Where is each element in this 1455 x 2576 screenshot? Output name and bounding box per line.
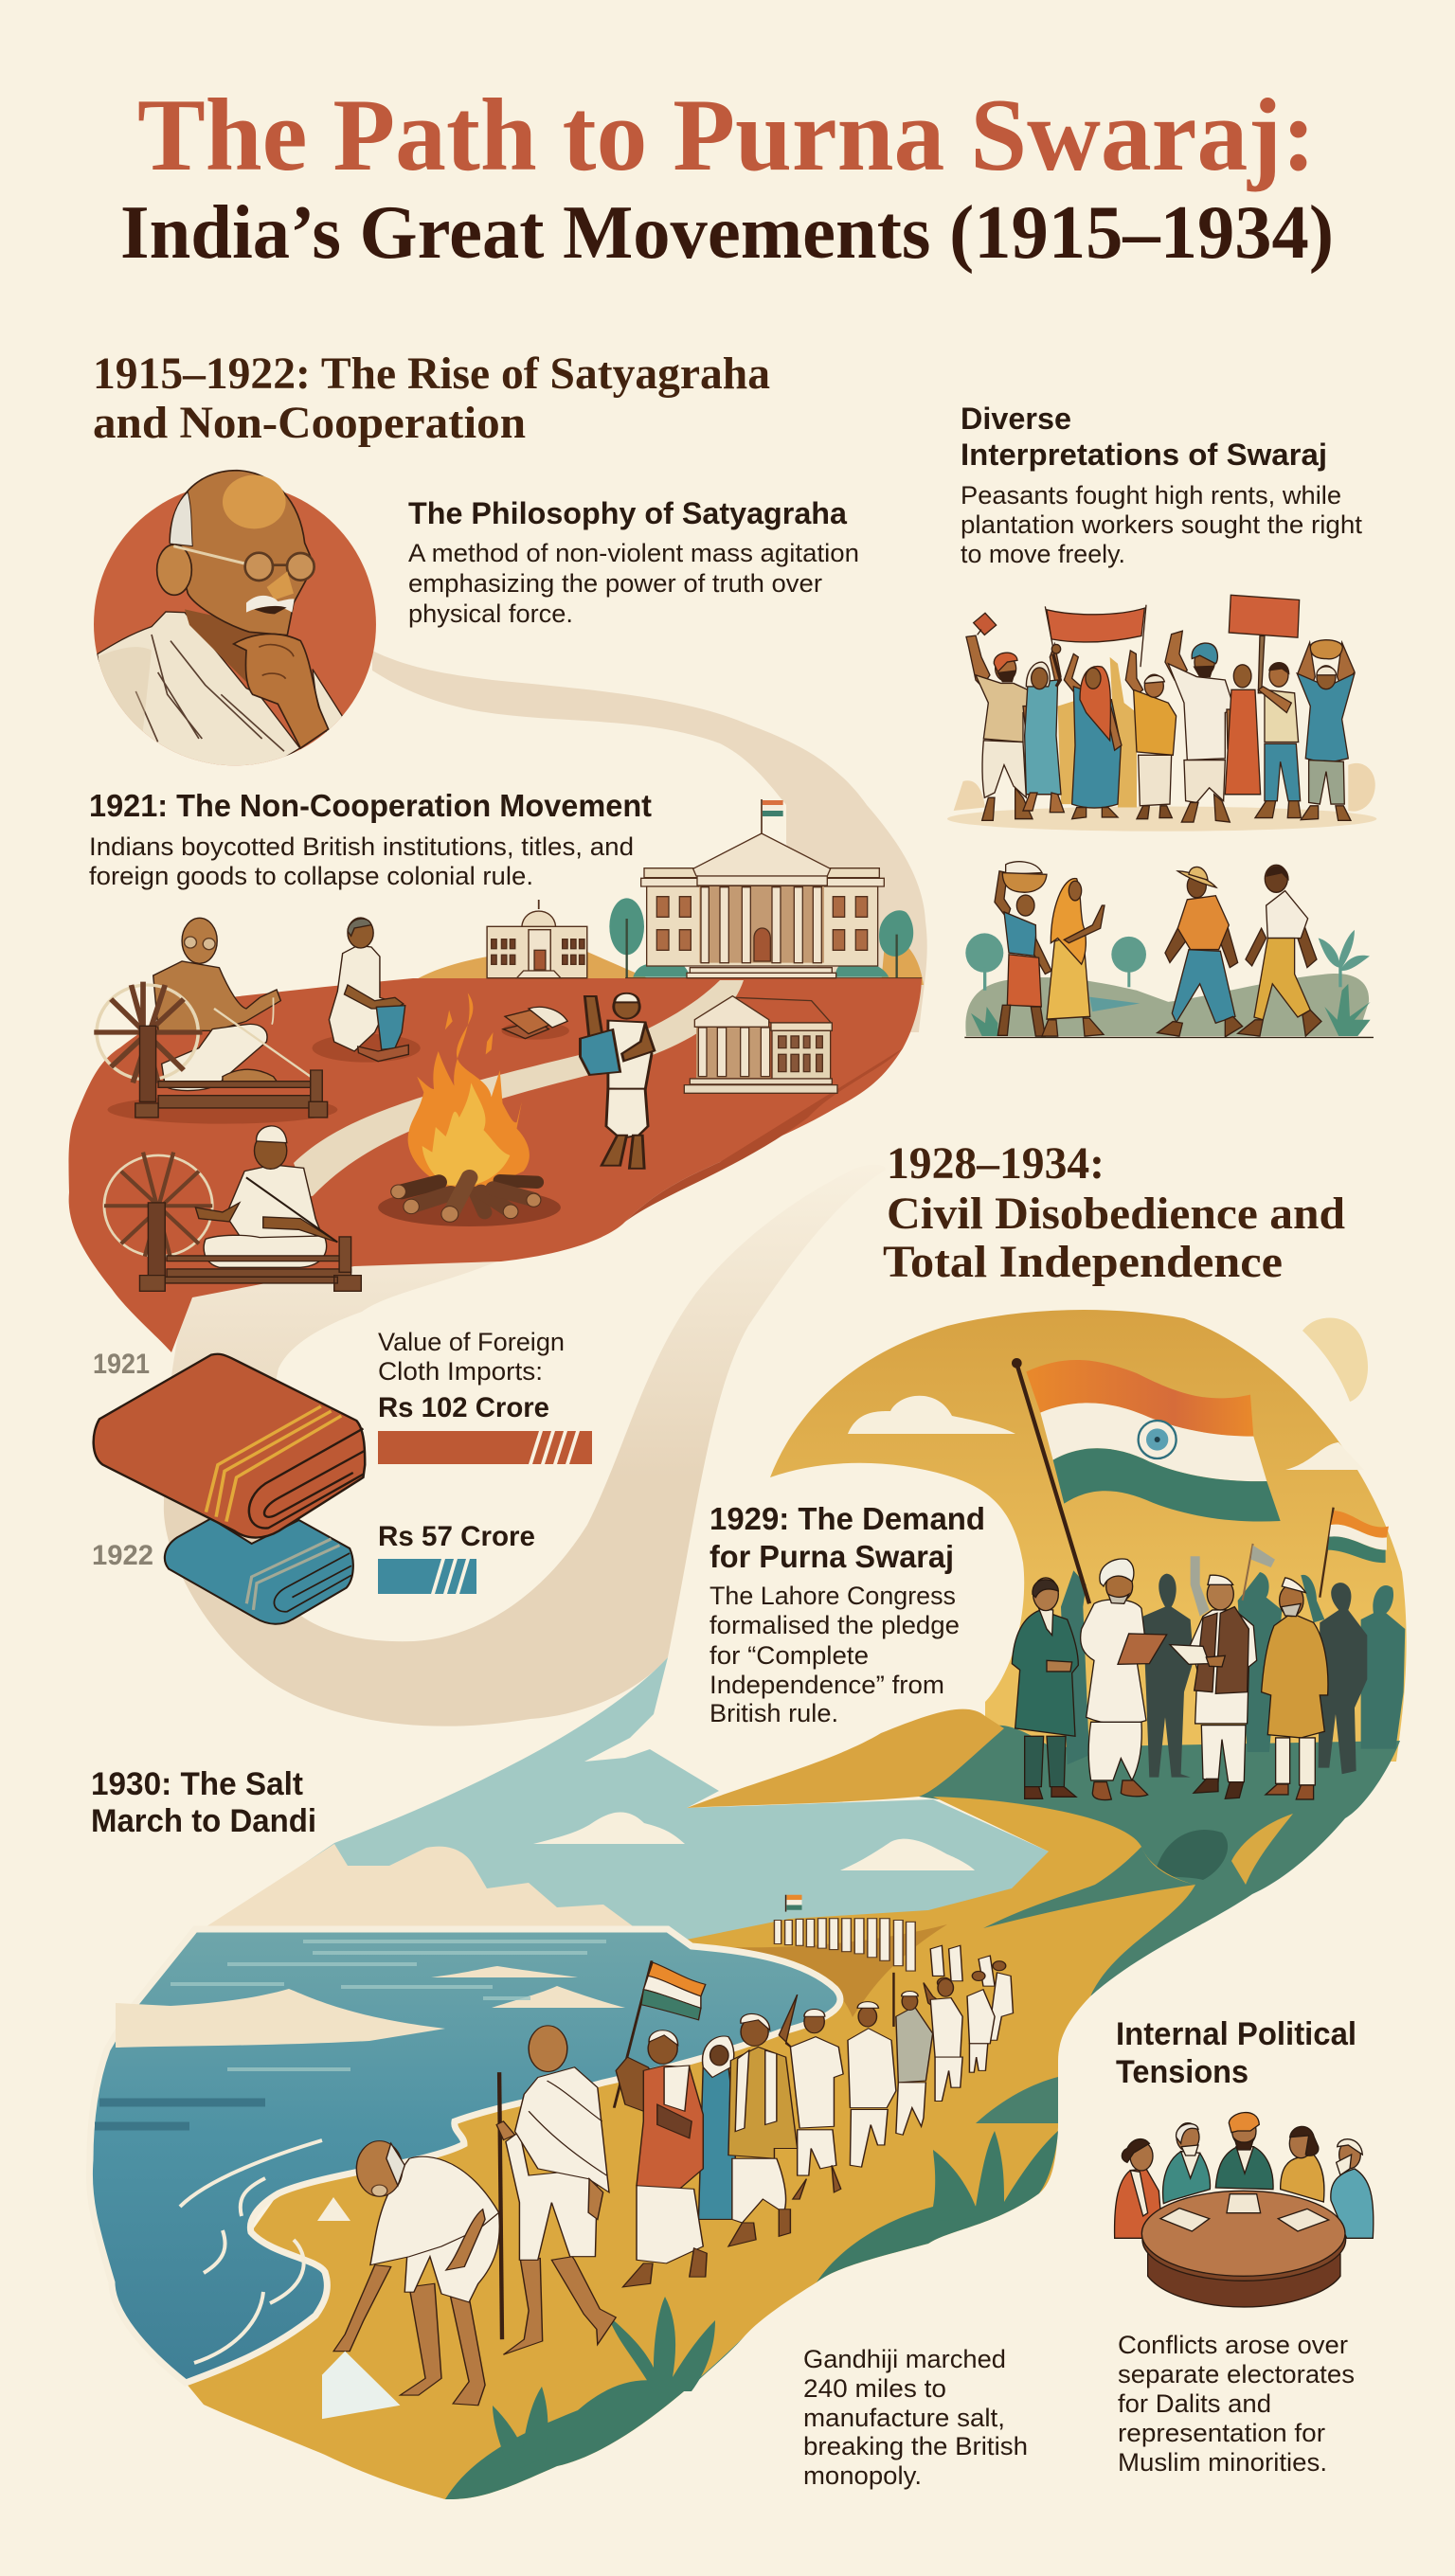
beach bbox=[186, 1797, 1195, 2499]
chart label: Value of Foreign bbox=[378, 1328, 565, 1356]
cream clouds over horizon bbox=[204, 1844, 636, 1928]
text block: diverse interpretations bbox=[961, 402, 1363, 568]
trees and bushes bbox=[609, 898, 913, 977]
table bbox=[1141, 2191, 1346, 2307]
leader in white with turban bbox=[1081, 1559, 1167, 1800]
dirt road bbox=[294, 980, 744, 1196]
protester: woman in light blue bbox=[1023, 644, 1064, 813]
tan hill bbox=[413, 933, 924, 985]
woman in blue sari bbox=[698, 2036, 735, 2219]
ground line bbox=[964, 1035, 1374, 1039]
protester: ochre top bbox=[1125, 651, 1177, 819]
text block: salt march body: 240 miles to bbox=[803, 2374, 946, 2403]
subtitle: India’s Great Movements (1915–1934) bbox=[120, 191, 1334, 275]
value Rs 57 Crore: Rs 57 Crore bbox=[378, 1521, 535, 1552]
green plants bottom bbox=[445, 2338, 743, 2499]
text block: demand for purna swaraj: 1929: The Demand bbox=[710, 1501, 985, 1536]
text block: salt march heading: March to Dandi bbox=[91, 1803, 316, 1839]
leader in green suit bbox=[1012, 1578, 1078, 1798]
chart label bbox=[378, 1328, 565, 1386]
year label 1921: 1921 bbox=[93, 1349, 150, 1380]
protester: woman in blue sari bbox=[1064, 653, 1122, 819]
green wedge between sand bands bbox=[983, 1847, 1195, 1928]
panel: 1929 scene dome bbox=[770, 1310, 1407, 1762]
banner bbox=[1045, 605, 1146, 687]
text block: demand for purna swaraj: British rule. bbox=[710, 1699, 838, 1727]
panel: Indian leaders with flag bbox=[1012, 1358, 1405, 1800]
darker sand shading bbox=[701, 1924, 947, 2017]
ribbon path: lower bbox=[164, 1165, 886, 1726]
text block: non-cooperation movement bbox=[89, 788, 652, 890]
marcher ochre bbox=[728, 2013, 798, 2246]
lower right building bbox=[684, 996, 837, 1093]
text block: internal tensions body: for Dalits and bbox=[1118, 2389, 1271, 2418]
text block: internal tensions body: separate electorates bbox=[1118, 2360, 1355, 2388]
trees bbox=[965, 930, 1371, 1036]
section heading 1928–1934 bbox=[883, 1138, 1345, 1287]
text block: internal tensions body bbox=[1118, 2331, 1355, 2477]
logs bbox=[391, 1177, 541, 1222]
bar: 1922 bbox=[378, 1559, 476, 1594]
text block: internal tensions body: Muslim minorities. bbox=[1118, 2448, 1327, 2477]
worker: basket on head bbox=[995, 862, 1051, 1036]
leader with vest bbox=[1170, 1575, 1257, 1798]
section heading 1928–1934: Total Independence bbox=[883, 1237, 1283, 1287]
protester: teal kurta with pot bbox=[1297, 640, 1355, 820]
text block: non-cooperation movement: 1921: The Non-Cooperation Movement bbox=[89, 788, 652, 823]
red blob bbox=[69, 978, 922, 1352]
sand hill bbox=[687, 1709, 1004, 1808]
text block: diverse interpretations: plantation workers sought the right bbox=[961, 510, 1363, 539]
protester: white kurta, teal turban bbox=[1165, 631, 1236, 822]
small flag in the distance bbox=[786, 1895, 802, 1912]
section heading 1915–1922: 1915–1922: The Rise of Satyagraha bbox=[93, 349, 770, 399]
text block: salt march body bbox=[803, 2345, 1028, 2490]
title: The Path to Purna Swaraj: bbox=[137, 78, 1316, 192]
salt mound small bbox=[317, 2197, 350, 2221]
distant column bbox=[774, 1919, 915, 1971]
buildings bbox=[609, 799, 922, 1093]
man holding blue shirt bbox=[580, 993, 655, 1169]
text block: demand for purna swaraj: The Lahore Congress bbox=[710, 1582, 956, 1610]
text block: demand for purna swaraj: formalised the pledge bbox=[710, 1611, 960, 1639]
clouds bbox=[848, 1396, 1015, 1434]
section heading 1915–1922 bbox=[93, 349, 770, 448]
worker: white shirt bbox=[1238, 865, 1321, 1036]
salt pile bbox=[322, 2352, 400, 2419]
delegates bbox=[1115, 2113, 1374, 2238]
dark foliage bbox=[1156, 1830, 1228, 1880]
text block: salt march body: Gandhiji marched bbox=[803, 2345, 1006, 2373]
panel: coastal landscape bbox=[89, 1657, 1400, 2499]
text block: demand for purna swaraj bbox=[710, 1501, 985, 1727]
marcher with flag bbox=[614, 1960, 707, 2287]
marcher with satchel bbox=[848, 2002, 896, 2167]
panel: peasants and workers walking bbox=[964, 862, 1374, 1037]
text block: philosophy of satyagraha bbox=[408, 496, 859, 628]
text block: salt march heading: 1930: The Salt bbox=[91, 1766, 303, 1802]
section heading 1928–1934: Civil Disobedience and bbox=[887, 1189, 1345, 1239]
charkha wheel bbox=[94, 982, 328, 1118]
text block: diverse interpretations: to move freely. bbox=[961, 540, 1125, 568]
text block: diverse interpretations: Interpretations of Swaraj bbox=[961, 438, 1327, 472]
leader in ochre coat bbox=[1262, 1578, 1328, 1799]
placard bbox=[1229, 595, 1300, 693]
text block: internal tensions body: representation for bbox=[1118, 2419, 1325, 2447]
text block: philosophy of satyagraha: The Philosophy of Satyagraha bbox=[408, 496, 847, 530]
sky bbox=[204, 1657, 1049, 1951]
text block: philosophy of satyagraha: A method of non-violent mass agitation bbox=[408, 539, 859, 567]
value Rs 102 Crore: Rs 102 Crore bbox=[378, 1392, 549, 1423]
flag on building bbox=[763, 800, 783, 816]
panel: red field of Non-Cooperation bbox=[69, 933, 924, 1352]
hills bbox=[965, 974, 1369, 1036]
small flags bbox=[1243, 1508, 1389, 1601]
text block: diverse interpretations: Diverse bbox=[961, 402, 1071, 436]
bonfire bbox=[408, 993, 530, 1189]
green wedge on right of beach bbox=[976, 2077, 1058, 2123]
text block: internal political tensions heading: Internal Political bbox=[1116, 2016, 1356, 2052]
silhouettes bbox=[1061, 1570, 1405, 1764]
section heading 1928–1934: 1928–1934: bbox=[887, 1138, 1105, 1189]
bar: 1921 bbox=[378, 1431, 592, 1464]
woman in white with blue cloth bbox=[329, 918, 408, 1062]
text block: internal political tensions heading: Tensions bbox=[1116, 2054, 1248, 2090]
worker: hat and orange shirt bbox=[1158, 867, 1243, 1037]
marcher with raised arm bbox=[924, 1979, 962, 2101]
folded cloth and books bbox=[503, 1007, 567, 1039]
green hills bbox=[919, 1726, 1400, 1996]
ribbon path: upper bbox=[372, 651, 927, 1032]
year label 1922: 1922 bbox=[92, 1540, 153, 1571]
text block: philosophy of satyagraha: emphasizing the power of truth over bbox=[408, 569, 822, 598]
pole bbox=[1016, 1364, 1089, 1603]
panel: Gandhi at charkha, woman, second spinner, bonfire bbox=[94, 918, 569, 1291]
worker: woman in yellow sari bbox=[1042, 879, 1105, 1036]
text block: demand for purna swaraj: Independence” from bbox=[710, 1671, 944, 1699]
panel: round table bbox=[1115, 2113, 1374, 2307]
panel: Salt March marchers bbox=[322, 1895, 1013, 2419]
text block: non-cooperation movement: Indians boycotted British institutions, titles, and bbox=[89, 832, 634, 861]
cloth stack 1921 red bbox=[94, 1354, 365, 1538]
far marchers bbox=[930, 1945, 1013, 2072]
marcher white bbox=[779, 1995, 843, 2199]
panel: foreign cloth imports bbox=[92, 1328, 592, 1624]
text block: demand for purna swaraj: for Purna Swaraj bbox=[710, 1539, 954, 1574]
text block: non-cooperation movement: foreign goods to collapse colonial rule. bbox=[89, 862, 533, 890]
text block: salt march body: monopoly. bbox=[803, 2461, 922, 2490]
chart label: Cloth Imports: bbox=[378, 1357, 543, 1386]
ground line bbox=[625, 976, 922, 979]
panel: Gandhi portrait bbox=[94, 471, 376, 770]
cloth stack 1922 blue bbox=[165, 1518, 353, 1624]
panel: protesters group bbox=[947, 595, 1376, 832]
Gandhi bending for salt bbox=[333, 2141, 499, 2406]
sea bbox=[89, 1929, 840, 2383]
text block: salt march heading bbox=[91, 1766, 316, 1839]
text block: demand for purna swaraj: for “Complete bbox=[710, 1641, 869, 1670]
small domed building bbox=[487, 900, 587, 978]
marcher grey bbox=[893, 1973, 933, 2135]
raised arm bbox=[1191, 1556, 1210, 1617]
text block: internal political tensions heading bbox=[1116, 2016, 1356, 2090]
main government building bbox=[641, 799, 884, 978]
section heading 1915–1922: and Non-Cooperation bbox=[93, 398, 526, 448]
second spinner bbox=[104, 1126, 361, 1291]
green plants right bbox=[817, 2193, 1039, 2282]
protester: blue trousers bbox=[1255, 663, 1301, 818]
text block: philosophy of satyagraha: physical force. bbox=[408, 599, 573, 628]
gold leaf bbox=[1231, 1814, 1293, 1885]
text block: diverse interpretations: Peasants fought high rents, while bbox=[961, 481, 1341, 510]
text block: salt march body: manufacture salt, bbox=[803, 2404, 1005, 2432]
text block: salt march body: breaking the British bbox=[803, 2432, 1028, 2460]
text block: internal tensions body: Conflicts arose over bbox=[1118, 2331, 1348, 2359]
waves and sandbars bbox=[116, 1966, 625, 2048]
small clouds bbox=[533, 1812, 685, 1844]
Gandhi spinning bbox=[94, 918, 328, 1118]
protester: tan kurta with hammer bbox=[966, 613, 1035, 820]
protester: woman in orange bbox=[1225, 665, 1261, 795]
Gandhi walking bbox=[496, 2026, 616, 2354]
big flag bbox=[1026, 1360, 1281, 1522]
